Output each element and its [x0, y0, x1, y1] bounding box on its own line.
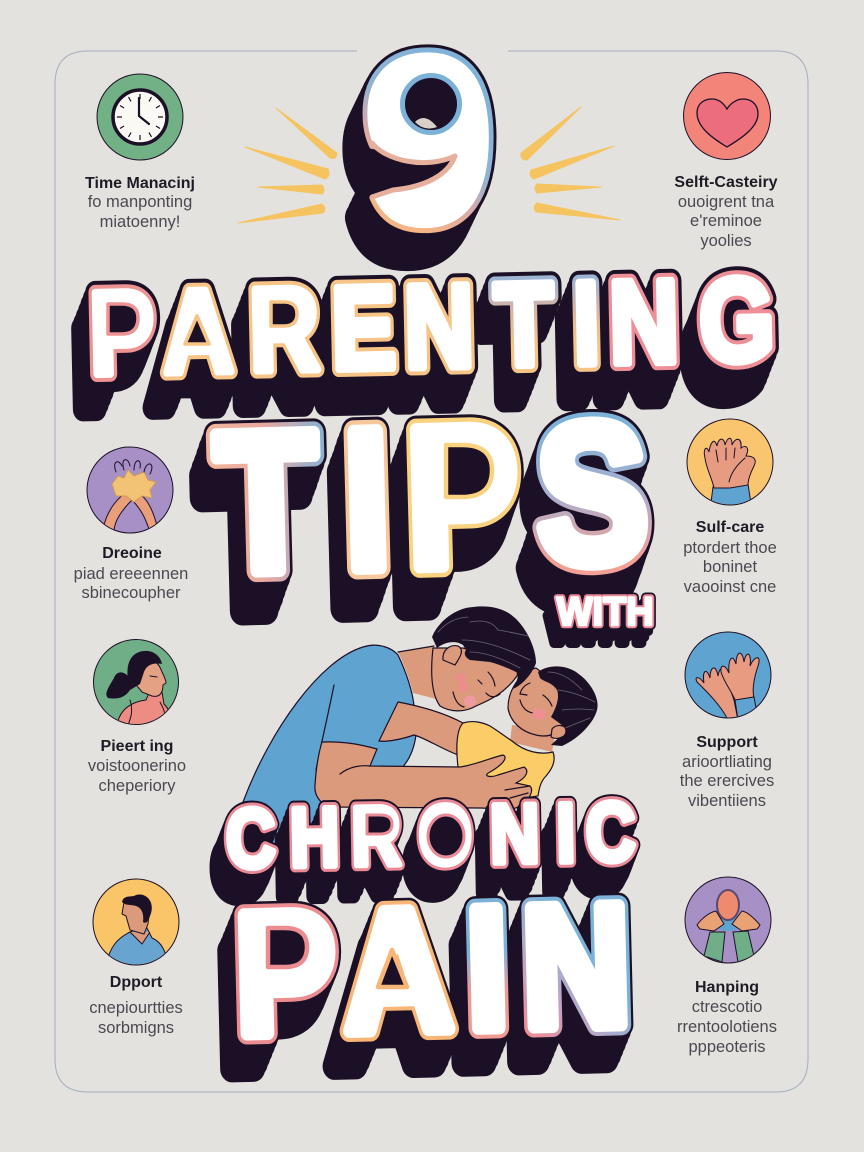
- tip text: voistoonerino: [88, 757, 186, 775]
- title word: WITH: WITH: [557, 590, 654, 634]
- tip text: ptordert thoe: [683, 539, 777, 557]
- title word: PARENTING: PARENTING: [76, 283, 764, 430]
- tip text: rrentoolotiens: [677, 1018, 777, 1036]
- title word: CHRONIC: CHRONIC: [212, 815, 624, 916]
- title word: TIPS: TIPS: [198, 421, 637, 654]
- title numeral 9: 9: [361, 34, 478, 280]
- icon: woman side profile: [94, 640, 178, 730]
- title word: PAIN: PAIN: [233, 869, 633, 1071]
- title word: CHRONIC: CHRONIC: [218, 803, 629, 904]
- title word: PARENTING: PARENTING: [83, 265, 771, 411]
- CHRONIC letter counters: [367, 815, 464, 857]
- tip text: fo manponting: [88, 193, 192, 211]
- tip text: boninet: [703, 558, 757, 576]
- rounded frame: [55, 51, 808, 1092]
- parent face: [432, 648, 518, 711]
- icon: hands around figure: [685, 877, 771, 963]
- title word: WITH: [547, 590, 654, 652]
- title word: TIPS: TIPS: [205, 401, 644, 634]
- tip: self-care hands (right): [683, 419, 777, 596]
- child face details: [520, 683, 552, 720]
- tip text: sorbmigns: [98, 1019, 174, 1037]
- icon: two raised hands: [685, 632, 771, 720]
- parent hair: [432, 606, 536, 689]
- title word: WITH: WITH: [557, 590, 654, 634]
- title numeral 9: 9: [370, 17, 487, 263]
- child hair: [538, 666, 598, 746]
- icon: clock: [97, 74, 183, 160]
- title word: WITH: WITH: [547, 608, 644, 652]
- tip: hanping (right): [677, 877, 777, 1056]
- PARENTING letter counters: [108, 302, 297, 344]
- title numeral 9: 9: [358, 40, 476, 286]
- title word: PAIN: PAIN: [230, 876, 630, 1077]
- child neck: [510, 725, 556, 752]
- title word: WITH: WITH: [557, 590, 654, 634]
- tip text: pppeoteris: [688, 1038, 766, 1056]
- TIPS letter counter: [446, 445, 492, 497]
- title word: PARENTING: PARENTING: [88, 253, 776, 399]
- tip text: vibentiiens: [688, 792, 766, 810]
- PAIN letter counters: [268, 928, 407, 987]
- parent ear: [443, 646, 461, 665]
- tip text: Dreoine: [102, 545, 162, 562]
- icon: heart: [684, 72, 770, 160]
- title word: PARENTING: PARENTING: [86, 259, 774, 405]
- parent back arm: [379, 702, 463, 755]
- tip text: [74, 545, 188, 602]
- title word: CHRONIC: CHRONIC: [225, 785, 636, 886]
- illustration: parent hugging child: [243, 606, 598, 860]
- parent neck: [398, 646, 440, 700]
- tip: dreoine (left): [74, 447, 188, 602]
- title numeral 9: 9: [352, 52, 470, 298]
- left sunburst rays: [238, 108, 337, 223]
- title word: TIPS: TIPS: [213, 381, 651, 614]
- tip: self-care heart (top right): [674, 72, 778, 250]
- tip text: vaooinst cne: [684, 578, 776, 596]
- title word: TIPS: TIPS: [213, 381, 651, 614]
- tip text: [680, 734, 774, 810]
- tip text: Hanping: [695, 979, 759, 996]
- tip text: Selft-Casteiry: [674, 174, 778, 191]
- child ear: [551, 725, 566, 738]
- tip text: ouoigrent tna: [678, 193, 775, 211]
- tip text: arioortliating: [682, 753, 772, 771]
- tip text: cheperiory: [98, 777, 176, 795]
- tip text: piad ereeennen: [74, 565, 188, 583]
- parent front arm and hand: [315, 742, 532, 809]
- icon: open hand: [687, 419, 773, 510]
- child shirt: [457, 722, 554, 800]
- tip text: Sulf-care: [696, 519, 764, 536]
- tip: pieerting (left): [88, 640, 186, 795]
- title word: PARENTING: PARENTING: [81, 271, 769, 417]
- tip text: [85, 175, 195, 231]
- title word: CHRONIC: CHRONIC: [223, 791, 634, 892]
- tip text: e'reminoe: [690, 212, 762, 230]
- title word: TIPS: TIPS: [203, 408, 641, 641]
- title numeral 9: 9: [364, 28, 481, 274]
- title word: CHRONIC: CHRONIC: [220, 797, 632, 898]
- title word: TIPS: TIPS: [208, 394, 646, 627]
- icon: person with tangled head: [87, 447, 173, 533]
- title word: TIPS: TIPS: [210, 388, 649, 621]
- tip text: sbinecoupher: [81, 584, 181, 602]
- title word: CHRONIC: CHRONIC: [225, 785, 636, 886]
- title numeral 9: 9: [367, 22, 484, 268]
- title word: PARENTING: PARENTING: [79, 277, 767, 424]
- numeral 9 counter and lower opening: [356, 76, 460, 200]
- icon: man portrait: [93, 879, 179, 965]
- title word: PAIN: PAIN: [226, 888, 625, 1089]
- title word: PAIN: PAIN: [233, 869, 633, 1071]
- child head: [508, 668, 566, 736]
- tip text: cnepiourtties: [89, 999, 183, 1017]
- parent shirt: [243, 645, 416, 860]
- tip: support (right): [680, 632, 774, 810]
- tip text: [674, 174, 778, 250]
- title word: TIPS: TIPS: [201, 414, 639, 647]
- title word: WITH: WITH: [550, 602, 647, 646]
- tip text: [88, 738, 186, 795]
- title word: CHRONIC: CHRONIC: [225, 785, 636, 886]
- title numeral 9: 9: [370, 17, 487, 263]
- title word: PAIN: PAIN: [221, 900, 620, 1101]
- title word: WITH: WITH: [554, 596, 651, 640]
- title word: PAIN: PAIN: [228, 882, 628, 1083]
- tip text: Time Manacinj: [85, 175, 195, 192]
- tip text: Support: [696, 734, 758, 751]
- tip text: Dpport: [110, 974, 163, 991]
- tip text: miatoenny!: [100, 213, 180, 231]
- tip: time managing (top left): [85, 74, 195, 231]
- right sunburst rays: [521, 107, 620, 220]
- title word: PAIN: PAIN: [223, 894, 623, 1095]
- title word: PARENTING: PARENTING: [88, 253, 776, 399]
- tip text: yoolies: [700, 232, 752, 250]
- title word: PAIN: PAIN: [233, 869, 633, 1071]
- title numeral 9: 9: [355, 46, 473, 292]
- title numeral 9: 9: [370, 17, 487, 263]
- parent face details: [453, 672, 500, 707]
- title word: PARENTING: PARENTING: [74, 288, 762, 435]
- title word: TIPS: TIPS: [213, 381, 651, 614]
- tip text: [677, 979, 777, 1056]
- title word: PAIN: PAIN: [218, 905, 618, 1106]
- tip text: ctrescotio: [692, 998, 762, 1016]
- title word: CHRONIC: CHRONIC: [216, 809, 627, 910]
- tip text: [89, 974, 183, 1037]
- tip text: [683, 519, 777, 596]
- title word: PARENTING: PARENTING: [88, 253, 776, 399]
- tip text: Pieert ing: [101, 738, 173, 755]
- tip text: the erercives: [680, 772, 774, 790]
- tip: dpport (left): [89, 879, 183, 1037]
